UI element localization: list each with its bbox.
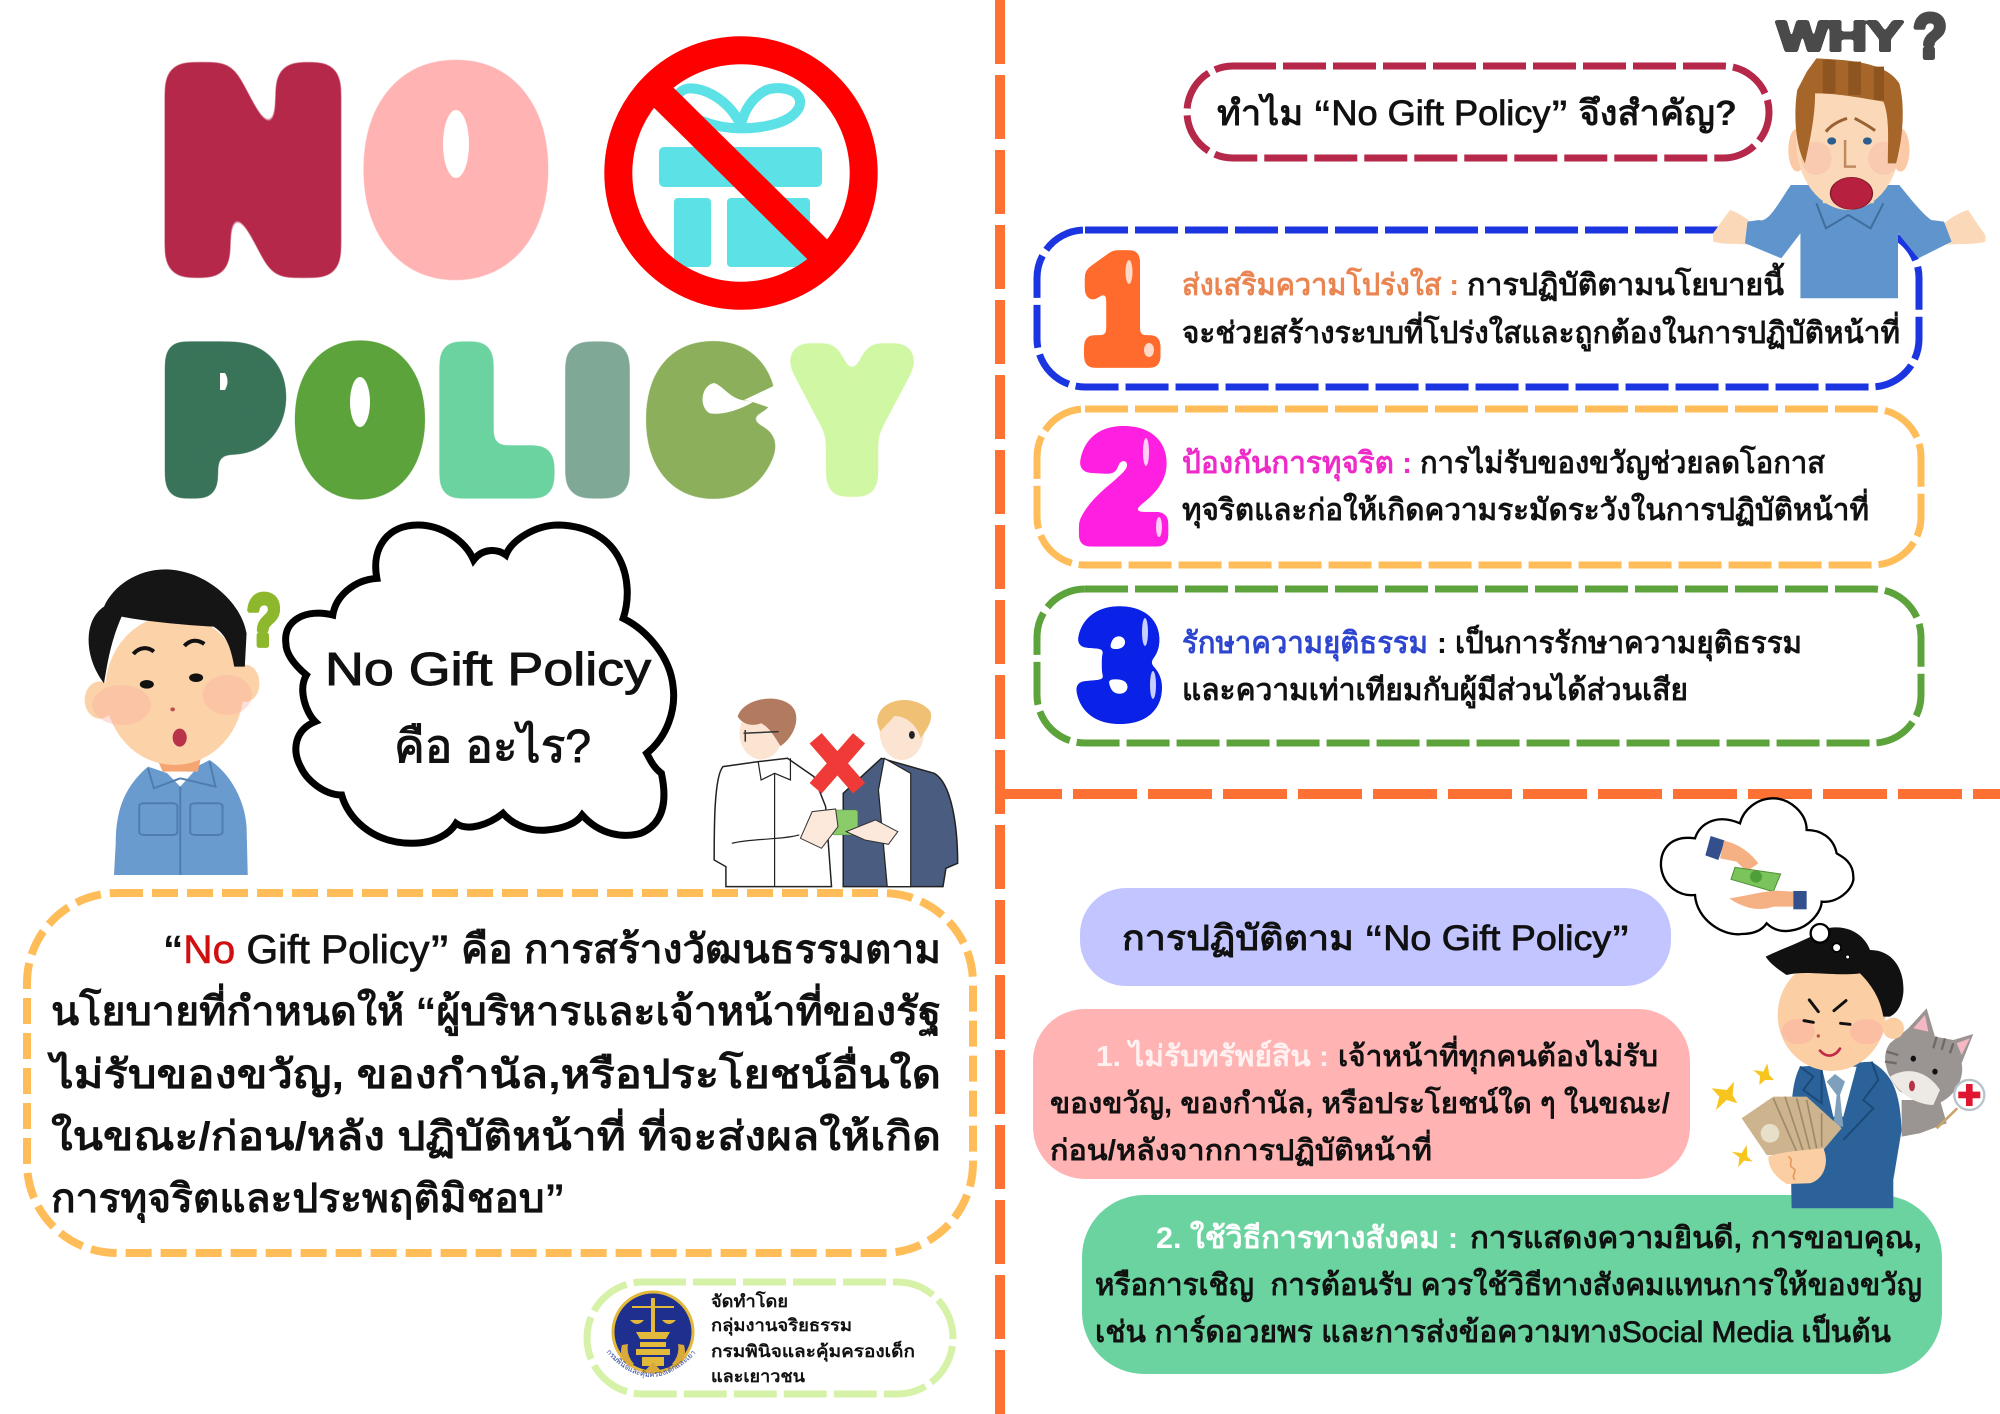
icon: puzzled man with question mark: ?: [247, 580, 281, 660]
numeral 3: 3: [1079, 583, 1161, 748]
title: POLICY: C: [658, 328, 762, 513]
text: definition paragraph: การทุจริตและประพฤติมิชอบ”: [51, 1177, 565, 1224]
thought cloud with money exchange: [1661, 798, 1853, 934]
title: POLICY: L: [444, 319, 544, 520]
title: NO: N: [166, 26, 340, 315]
heading pill: compliance: การปฏิบัติตาม “ No Gift Policy ”: [1122, 919, 1630, 958]
text: rule 2: [1095, 1220, 1922, 1349]
text: rule 1: เจ้าหน้าที่ทุกคนต้องไม่รับ: [1338, 1035, 1658, 1074]
heading: why important: [1187, 66, 1769, 158]
icon: two men refusing money: [714, 699, 958, 887]
icon: man with cash, cat and thought bubble: [1661, 798, 1984, 1208]
panel: reason 3 fairness: [1037, 583, 1921, 748]
icon: department seal: [606, 1290, 696, 1378]
text: definition paragraph: นโยบายที่กำหนดให้ “ผู้บริหารและเจ้าหน้าที่ของรัฐ: [51, 983, 941, 1038]
text: definition paragraph: ในขณะ/ก่อน/หลัง ปฏิบัติหน้าที่ ที่จะส่งผลให้เกิด: [51, 1108, 941, 1159]
heading: why important: ทำไม “No Gift Policy” จึงสำคัญ?: [1217, 92, 1737, 134]
text: reason 3: และความเท่าเทียมกับผู้มีส่วนได้ส่วนเสีย: [1182, 672, 1688, 709]
text: rule 1: ของขวัญ, ของกำนัล, หรือประโยชน์ใด ๆ ในขณะ/: [1050, 1085, 1670, 1121]
text: rule 2: การแสดงความยินดี, การขอบคุณ,: [1470, 1222, 1922, 1257]
text: reason 2: [1182, 444, 1869, 529]
text: reason 3: [1182, 624, 1802, 709]
text: rule 2: หรือการเชิญ การต้อนรับ ควรใช้วิธีทางสังคมแทนการให้ของขวัญ: [1095, 1267, 1922, 1303]
text: rule 1: 1. ไม่รับทรัพย์สิน :: [1096, 1039, 1329, 1073]
text: reason 2: การไม่รับของขวัญช่วยลดโอกาส: [1420, 444, 1826, 481]
text: definition paragraph: [46, 928, 941, 1224]
text: prepared by: กรมพินิจและคุ้มครองเด็ก: [711, 1339, 915, 1362]
text: prepared by: กลุ่มงานจริยธรรม: [711, 1316, 852, 1336]
panel: reason 1 transparency: [1037, 228, 1919, 390]
text: rule 1: ก่อน/หลังจากการปฏิบัติหน้าที่: [1050, 1129, 1432, 1167]
title: POLICY: I: [573, 324, 622, 516]
icon: crossed-out gift: [618, 50, 864, 296]
icon: shrugging man with WHY: [1713, 2, 1985, 298]
title: POLICY: P: [169, 320, 277, 521]
text: definition paragraph: “No Gift Policy” คือ การสร้างวัฒนธรรมตาม: [163, 928, 941, 972]
panel: social alternatives: [1082, 1195, 1942, 1374]
panel: definition box: [27, 893, 973, 1253]
text: prepared by: [711, 1291, 915, 1386]
title: POLICY: Y: [802, 325, 902, 516]
cat with sign: [1885, 1008, 1984, 1137]
credit badge: [584, 1278, 956, 1398]
text: reason 1: [1182, 262, 1900, 352]
thought cloud: what is No Gift Policy: คือ อะไร?: [394, 720, 591, 772]
businessman: [1766, 924, 1904, 1208]
text: prepared by: จัดทำโดย: [711, 1291, 788, 1311]
cash fan: [1742, 1097, 1842, 1184]
title: NO: [166, 26, 531, 315]
panel: reason 2 anti-corruption: [1037, 405, 1921, 569]
title: POLICY: O: [307, 328, 413, 511]
icon: department seal: กรมพินิจและคุ้มครองเด็กและเยาวชน: [606, 1350, 696, 1378]
text: reason 1: การปฏิบัติตามนโยบายนี้: [1467, 262, 1785, 302]
text: reason 2: ทุจริตและก่อให้เกิดความระมัดระวังในการปฏิบัติหน้าที่: [1182, 488, 1869, 529]
thought cloud: what is No Gift Policy: No Gift Policy: [325, 643, 651, 695]
icon: shrugging man with WHY: WHY: [1777, 13, 1903, 60]
panel: do not accept gifts: [1033, 1009, 1690, 1179]
numeral 2: 2: [1083, 405, 1165, 569]
icon: puzzled man with question mark: [85, 569, 281, 875]
title: POLICY: [169, 319, 902, 521]
numeral 1: 1: [1084, 228, 1156, 390]
sparkles: [1712, 1063, 1774, 1167]
text: reason 3: รักษาความยุติธรรม: [1182, 627, 1428, 662]
text: rule 2: เช่น การ์ดอวยพร และการส่งข้อความทางSocial Media เป็นต้น: [1095, 1313, 1891, 1349]
text: prepared by: และเยาวชน: [711, 1367, 805, 1386]
text: reason 2: ป้องกันการทุจริต :: [1182, 447, 1412, 482]
text: definition paragraph: ไม่รับของขวัญ, ของกำนัล,หรือประโยชน์อื่นใด: [46, 1046, 941, 1098]
text: reason 3: : เป็นการรักษาความยุติธรรม: [1437, 624, 1802, 662]
icon: shrugging man with WHY: ?: [1913, 2, 1947, 71]
heading pill: compliance: [1080, 888, 1671, 986]
text: reason 1: ส่งเสริมความโปร่งใส :: [1182, 266, 1459, 302]
text: reason 1: จะช่วยสร้างระบบที่โปร่งใสและถูกต้องในการปฏิบัติหน้าที่: [1182, 311, 1900, 352]
text: rule 1: [1050, 1035, 1670, 1167]
title: NO: O: [381, 42, 531, 297]
text: rule 2: 2. ใช้วิธีการทางสังคม :: [1156, 1220, 1458, 1255]
thought cloud: what is No Gift Policy: [286, 525, 674, 843]
